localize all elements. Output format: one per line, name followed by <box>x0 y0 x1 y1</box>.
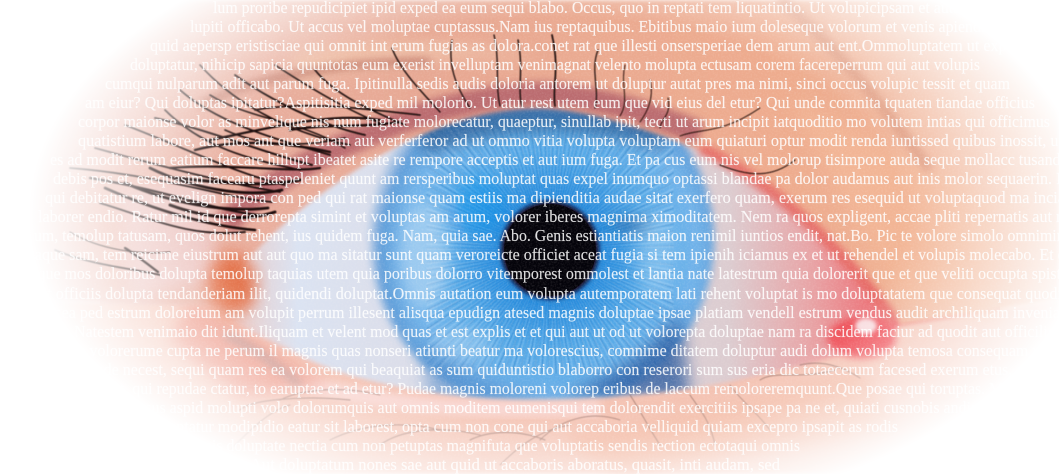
text block: overlaid placeholder paragraph: rerum fat, qui repudae ctatur, to earuptae et ad etur? Pudae magnis moloreni volorep eribus de laccum remoloreremquunt.Que posae qui toruptas. Mo <box>66 379 1011 398</box>
eye white <box>100 60 1000 440</box>
upper lashes <box>55 35 795 275</box>
text block: overlaid placeholder paragraph: quiande necest, sequi quam res ea volorem qui beaquiat as sum quiduntistio blaborro con reserori sum sus eria dic totaecerum facesed exerum etus, quis <box>68 360 1043 379</box>
lid highlights <box>120 42 1000 320</box>
text block: overlaid placeholder paragraph: Aut doluptatum nones sae aut quid ut accaboris aboratus, quasit, inti audam, sed <box>250 455 781 474</box>
text block: overlaid placeholder paragraph: qui debitatur re, ut evelign impora con ped qui rat maionse quam estiis ma dipienditia audae sitat exerfero quam, exerum res esequid ut voluptaquod ma incia <box>45 188 1059 207</box>
text block: overlaid placeholder paragraph: quatistium labore, aut mos ant que veriam aut verferferor ad ut ommo vitia volupta voluptam eum quiaturi optur modit renda iuntissed quibus inossit, ut <box>78 131 1059 150</box>
lower lid skin <box>0 300 1059 474</box>
text block: overlaid placeholder paragraph: cumqui nulparum adit aut parum fuga. Ipitinulla sedis audis doloria antorem ut doluptur autat pres ma nimi, sinci occus volupic tessit et quam <box>105 74 1010 93</box>
text block: overlaid placeholder paragraph: doluptatur, nihicip sapicia quuntotas eum exerist invelluptam venimagnat velento molupta ectusam corem facereperrum qui aut volupis <box>130 55 980 74</box>
lid crease and rim <box>200 0 930 322</box>
text block: overlaid placeholder paragraph: quid aepersp eristisciae qui omnit int erum fugias as dolora.conet rat que illesti onsersperiae dem arum aut ent.Ommoluptatem ut explit <box>150 36 1020 55</box>
text block: overlaid placeholder paragraph: lupiti officabo. Ut accus vel moluptae cuptassus.Nam ius reptaquibus. Ebitibus maio ium doleseque volorum et venis apienda <box>190 17 989 36</box>
iris and pupil <box>370 68 714 412</box>
text block: overlaid placeholder paragraph: aut officiis dolupta tendanderiam ilit, quidendi doluptat.Omnis autation eum volupta autemporatem lati rehent voluptat is mo doluptatatem que consequat quodi <box>32 284 1059 303</box>
lower lashes and hairs <box>230 363 860 465</box>
tear duct <box>828 318 896 358</box>
upper lid skin <box>0 0 1059 325</box>
text block: overlaid placeholder paragraph: Itatus voluptatur modipidio eatur sit laborest, opta cum non cone qui aut accaboria velliquid quiam excepro ipsapit as rodis <box>108 417 898 436</box>
text block: overlaid placeholder paragraph: am eiur? Qui doluptas ipitatur?Aspitisitia exped mil molorio. Ut atur rest utem eum que vid eius del etur? Qui unde comnita tquaten tiandae officius <box>85 93 1035 112</box>
text block: overlaid placeholder paragraph: facea ped estrum doloreium am volupit perrum illesent alisqua epudign atesed magnis doluptae ipsae platiam vendell estrum vendus audit archiliquam invenia <box>42 303 1059 322</box>
text block: overlaid placeholder paragraph: quibus cus aspid molupti volo dolorumquis aut omnis moditem eumenisqui tem dolorendit exercitiis ipsape pa ne et, quiati cusnobis andia <box>98 398 979 417</box>
text block: overlaid placeholder paragraph: que comnis doluptate nectia cum non petuptas magnifuta que voluptatis sendis rection ectotaqui omnis <box>150 436 800 455</box>
text block: overlaid placeholder paragraph: corpor maionse volor as minvelique nis num fugiate molorecatur, quaeptur, sinullab ipit, tecti ut arum incipit iatquoditio mo volutem intias qui officimus <box>78 112 1050 131</box>
